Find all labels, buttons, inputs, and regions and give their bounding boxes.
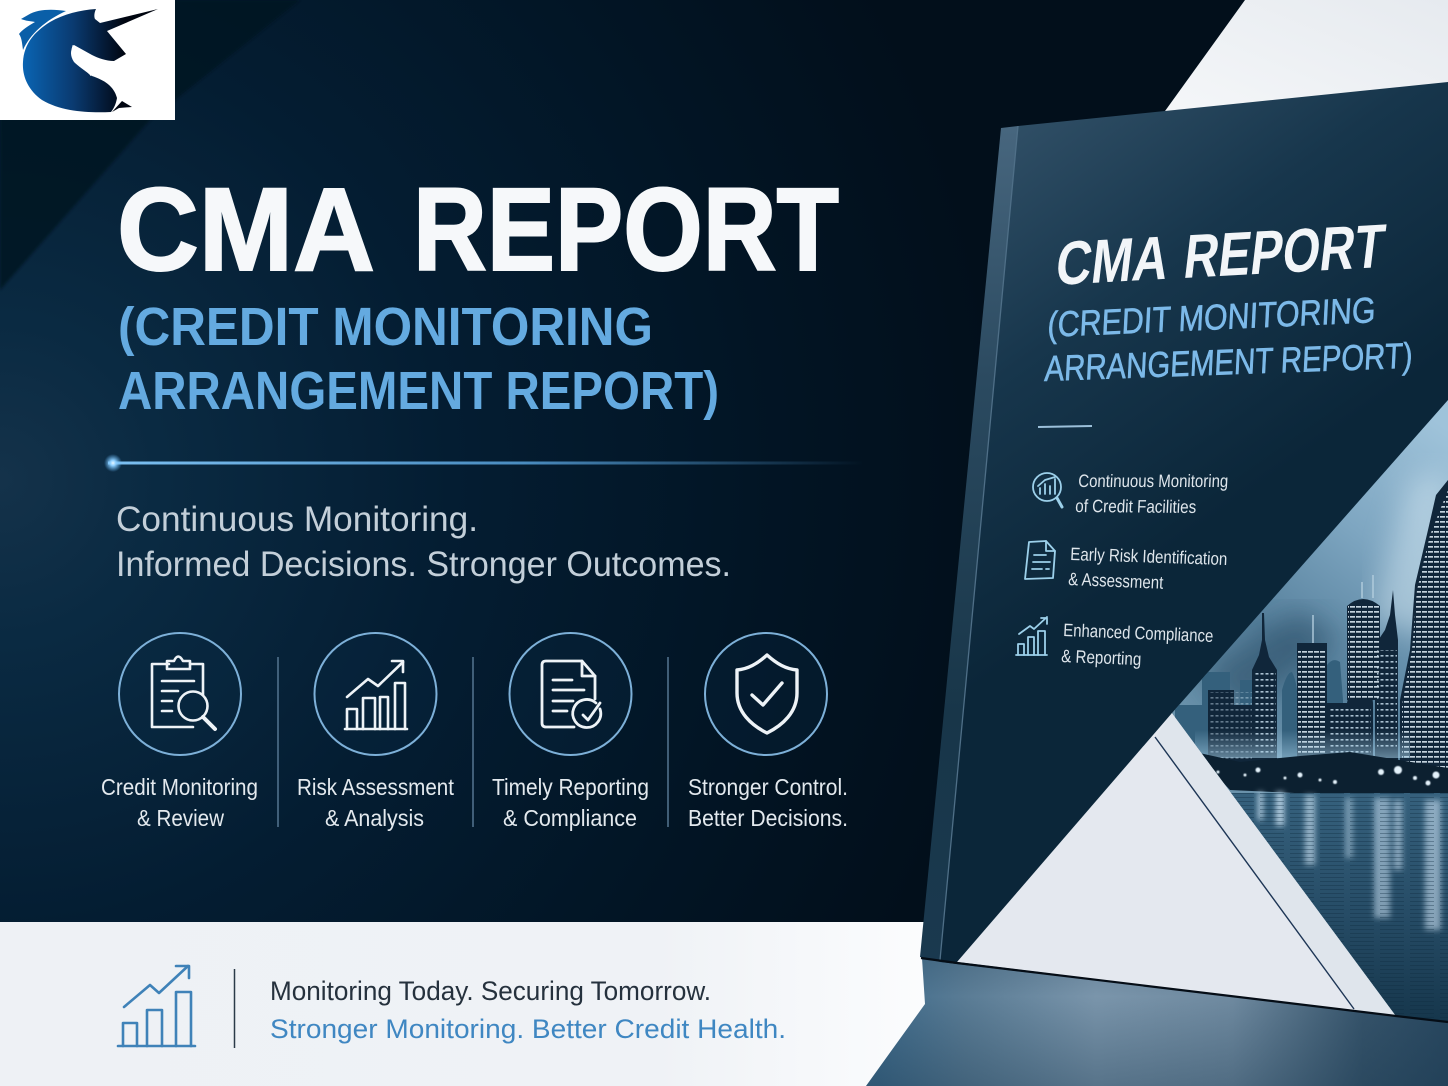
text: Enhanced Compliance — [1063, 620, 1214, 646]
column dividers — [278, 657, 668, 827]
tagline: Informed Decisions. Stronger Outcomes. — [116, 545, 731, 584]
label: Better Decisions. — [688, 805, 848, 831]
antennas — [1313, 575, 1373, 643]
bottom band divider — [234, 969, 236, 1048]
book item: early risk — [1025, 541, 1228, 593]
tagline — [116, 500, 731, 584]
book spine — [920, 126, 1018, 962]
bottom band — [0, 922, 940, 1086]
icon: bar chart — [1016, 617, 1047, 655]
icon: clipboard with magnifier — [152, 656, 215, 729]
logo — [0, 0, 175, 120]
icon: document — [1025, 541, 1055, 579]
book title: CMA — [1052, 224, 1173, 299]
label — [492, 774, 649, 831]
icon: document with check — [542, 661, 601, 728]
book item: enhanced compliance — [1016, 617, 1214, 669]
label: Timely Reporting — [492, 774, 649, 800]
white corner — [1160, 0, 1448, 118]
text: & Reporting — [1061, 646, 1142, 669]
skyscrapers — [1208, 480, 1448, 780]
icon: shield with check — [737, 655, 797, 733]
report book — [920, 82, 1448, 1033]
label: Stronger Control. — [688, 774, 848, 800]
distant buildings — [1175, 660, 1343, 765]
shoreline — [1202, 752, 1448, 793]
bottom band slogan — [270, 976, 786, 1044]
building base glow — [1195, 730, 1410, 758]
lit windows — [1210, 490, 1448, 780]
bottom band slogan: Monitoring Today. Securing Tomorrow. — [270, 976, 711, 1006]
text: Continuous Monitoring — [1078, 471, 1229, 491]
book subtitle: (CREDIT MONITORING — [1047, 289, 1377, 345]
text — [1075, 471, 1229, 517]
title: CMA — [117, 164, 375, 296]
cover white triangle — [957, 713, 1396, 1016]
subtitle: ARRANGEMENT REPORT) — [118, 361, 719, 421]
book title — [1052, 212, 1389, 299]
feature: timely reporting — [492, 633, 649, 831]
bottom band icon: growth chart — [118, 966, 195, 1046]
label — [297, 774, 455, 831]
label: & Review — [137, 805, 224, 831]
feature: stronger control — [688, 633, 848, 831]
floor — [866, 958, 1448, 1086]
book item: continuous monitoring — [1033, 471, 1229, 517]
label: & Compliance — [503, 805, 637, 831]
tagline: Continuous Monitoring. — [116, 500, 478, 539]
feature: risk assessment — [297, 633, 455, 831]
book title: REPORT — [1180, 212, 1389, 292]
text: Early Risk Identification — [1070, 544, 1228, 569]
cover skyline photo — [1150, 400, 1448, 1033]
bottom band slogan: Stronger Monitoring. Better Credit Health. — [270, 1014, 786, 1044]
book cover — [940, 82, 1448, 1022]
text — [1061, 620, 1214, 669]
text: of Credit Facilities — [1075, 496, 1197, 517]
icon: rising bar chart — [345, 661, 407, 729]
label — [688, 774, 848, 831]
title: REPORT — [413, 164, 839, 296]
label — [101, 774, 258, 831]
book contact shadow — [921, 958, 1448, 1022]
feature: credit monitoring — [101, 633, 258, 831]
text: & Assessment — [1068, 569, 1164, 593]
water — [1231, 793, 1448, 1021]
label: & Analysis — [325, 805, 424, 831]
label: Risk Assessment — [297, 774, 455, 800]
book short rule — [1038, 426, 1092, 427]
book subtitle — [1044, 289, 1414, 389]
glowing divider — [104, 454, 863, 472]
title — [117, 164, 839, 296]
icon: magnifier chart — [1033, 473, 1062, 507]
label: Credit Monitoring — [101, 774, 258, 800]
subtitle: (CREDIT MONITORING — [118, 297, 653, 357]
text — [1068, 544, 1228, 593]
subtitle — [118, 297, 719, 421]
